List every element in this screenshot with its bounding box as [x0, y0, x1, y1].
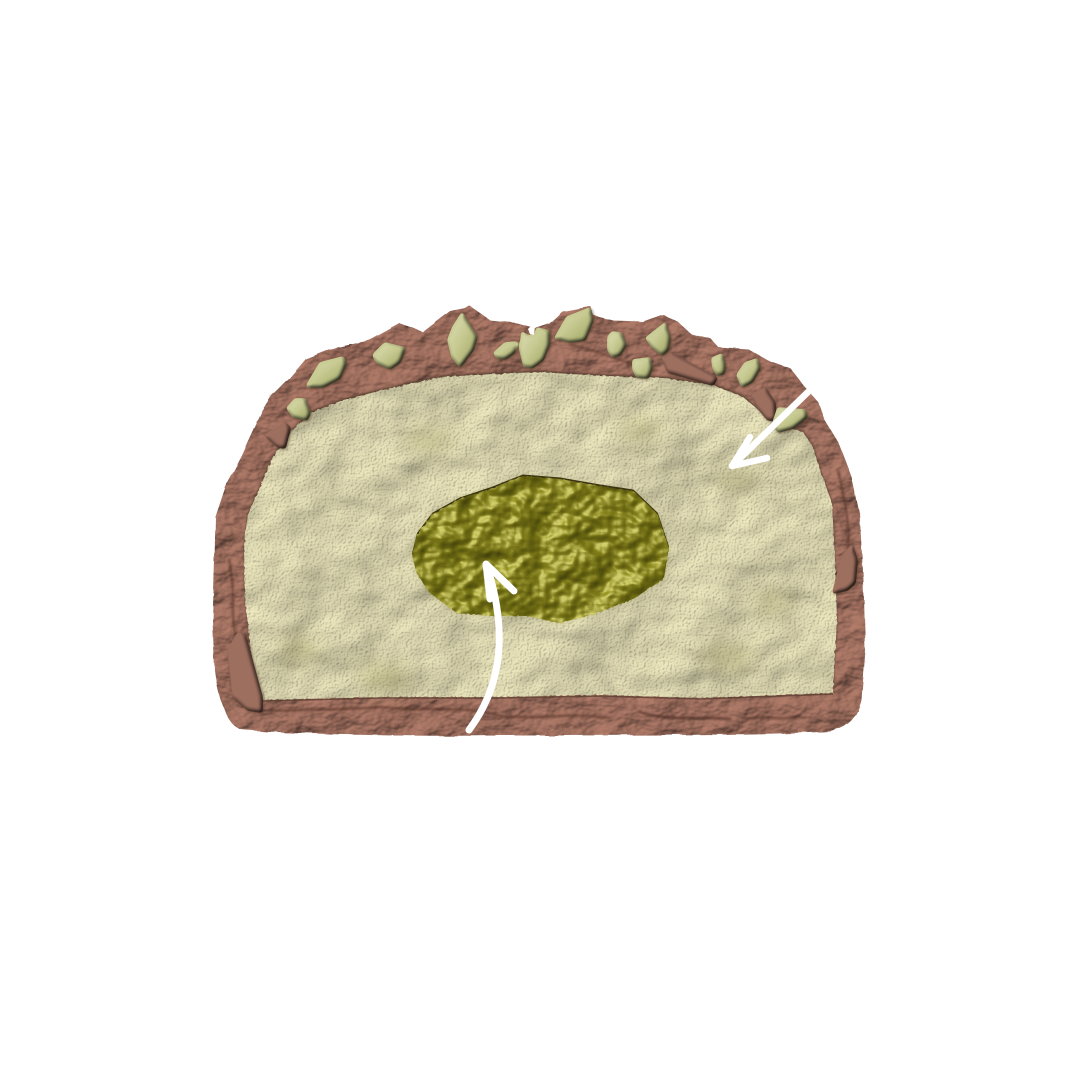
- cream shadow line: [244, 370, 837, 698]
- chocolate shell: [214, 308, 864, 734]
- cream filling: [244, 372, 837, 700]
- arrow: pointing to pistachio center: [469, 564, 514, 730]
- arrow: pointing to cream filling: [732, 392, 808, 466]
- pistachio pieces: [287, 308, 807, 432]
- shell crevices: [229, 345, 848, 720]
- jam halo: [413, 477, 668, 622]
- white notch: [528, 325, 535, 335]
- cream shading patches: [280, 420, 793, 692]
- illustration: cross-section of chocolate praline: [214, 308, 864, 734]
- bottom shell edge line: [263, 694, 833, 701]
- chocolate shards: [228, 353, 857, 712]
- jam edge: [413, 476, 668, 620]
- pistachio jam center: [413, 476, 668, 622]
- jam body: [413, 477, 668, 622]
